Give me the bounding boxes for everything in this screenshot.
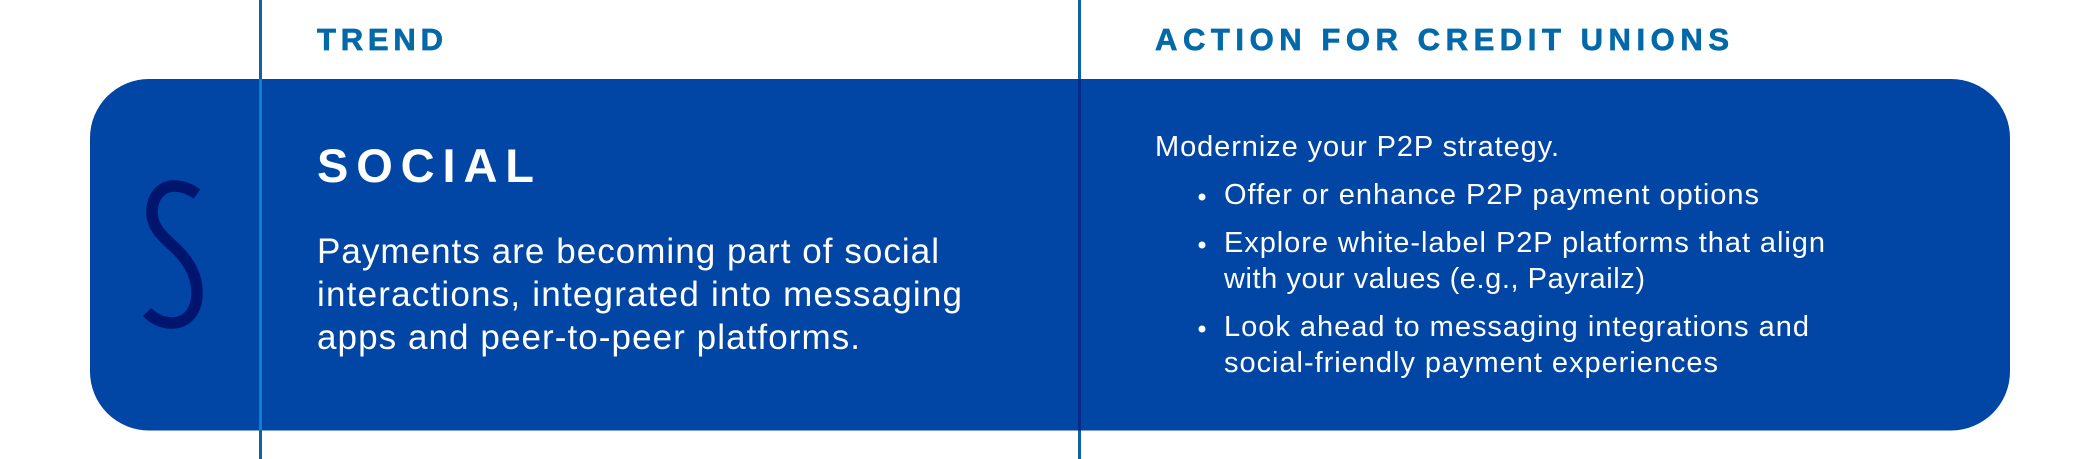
title: social: SOCIAL — [317, 139, 534, 192]
text block: trend description: interactions, integrated into messaging — [317, 275, 962, 314]
panel: social row background — [90, 79, 2010, 430]
text block: trend description: Payments are becoming part of social — [317, 232, 939, 271]
text block: trend description — [317, 232, 962, 357]
text block: action lead: Modernize your P2P strategy. — [1155, 131, 1559, 163]
text block: trend description: apps and peer-to-peer platforms. — [317, 318, 860, 357]
list: action bullets: with your values (e.g., Payrailz) — [1223, 263, 1645, 295]
column divider: trend — [259, 0, 262, 459]
list: action bullets: Explore white-label P2P platforms that align — [1224, 227, 1825, 259]
column divider: action — [1078, 0, 1081, 459]
list: action bullets: Look ahead to messaging integrations and — [1224, 311, 1809, 343]
list: action bullets: Offer or enhance P2P payment options — [1224, 179, 1759, 211]
heading: trend column: TREND — [317, 22, 443, 57]
heading: action column: ACTION FOR CREDIT UNIONS — [1155, 22, 1729, 57]
list: action bullets: social-friendly payment experiences — [1224, 347, 1718, 379]
icon: letter S — [147, 186, 197, 323]
list: action bullets — [1198, 179, 1825, 379]
